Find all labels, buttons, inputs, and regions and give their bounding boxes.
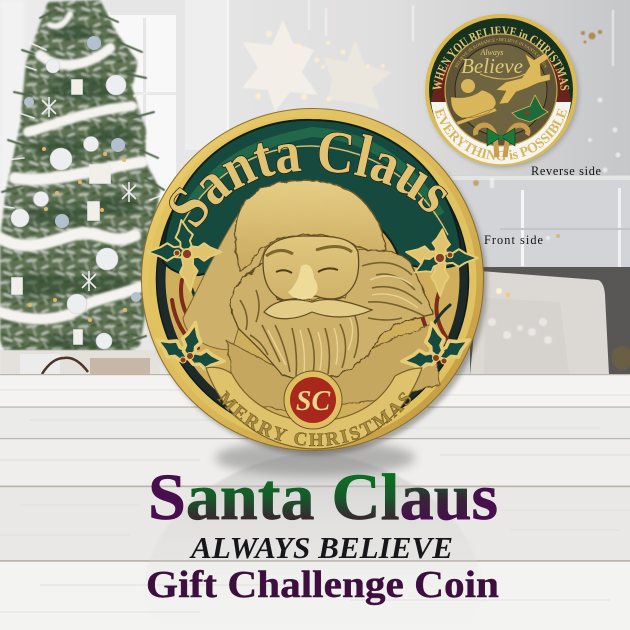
hat tail <box>183 188 272 350</box>
large front coin <box>141 108 490 457</box>
beard and hair <box>230 250 433 379</box>
christmas tree <box>0 0 164 374</box>
always believe script: Believe <box>461 54 523 78</box>
holly: lower right <box>401 321 474 370</box>
window <box>108 0 183 250</box>
tree deep shadows <box>8 24 139 350</box>
always believe script: Always <box>479 48 504 57</box>
title: Santa Claus: Santa Claus <box>148 461 498 534</box>
candy canes and bow <box>476 125 528 157</box>
hat fur brim <box>235 180 386 270</box>
nose and cheeks <box>288 264 318 299</box>
heading block <box>146 461 499 606</box>
gift boxes <box>0 350 160 374</box>
hanging lights <box>308 0 620 240</box>
holly <box>512 95 548 122</box>
small reverse coin <box>425 14 580 170</box>
tree baubles <box>11 59 126 349</box>
table: white wood planks <box>0 374 630 630</box>
tree garlands <box>0 14 142 319</box>
face <box>263 236 359 300</box>
wall panels <box>440 175 630 270</box>
label: reverse side: Reverse side <box>531 164 602 178</box>
sleigh <box>451 90 497 125</box>
SC seal: SC <box>296 386 330 417</box>
banner: merry christmas <box>206 367 422 449</box>
robe <box>226 325 440 412</box>
background: room <box>0 0 630 380</box>
small reverse coin: EVERYTHING is POSSIBLE <box>434 108 568 160</box>
fairy lights <box>255 31 385 102</box>
small reverse coin: BELIEVE IN ROMANCE • BELIEVE IN SANTA CLAUS <box>454 38 548 68</box>
reindeer <box>496 53 550 104</box>
subtitle: gift challenge coin: Gift Challenge Coin <box>146 564 499 606</box>
moustache <box>264 300 372 319</box>
tree branch tips <box>2 10 164 352</box>
green enamel panel behind lettering <box>163 120 462 275</box>
enamel ring <box>156 124 468 436</box>
subtitle: always believe: ALWAYS BELIEVE <box>189 530 453 565</box>
coin reflection <box>143 452 483 630</box>
small reverse coin: WHEN YOU BELIEVE in CHRISTMAS <box>432 26 570 90</box>
SC seal <box>284 371 342 429</box>
holly: lower left <box>152 321 225 370</box>
holly: upper left <box>147 219 221 292</box>
holly: upper right <box>405 229 478 296</box>
star decorations <box>242 20 392 112</box>
side stripes <box>172 280 450 348</box>
coin title: Santa Claus: Santa Claus <box>169 132 448 228</box>
side labels <box>484 164 602 247</box>
large front coin: MERRY CHRISTMAS <box>217 390 412 446</box>
tree snowflakes and ornaments <box>12 80 136 344</box>
gold leaf ornament <box>581 30 602 44</box>
sofa <box>470 267 630 377</box>
label: front side: Front side <box>484 233 544 247</box>
